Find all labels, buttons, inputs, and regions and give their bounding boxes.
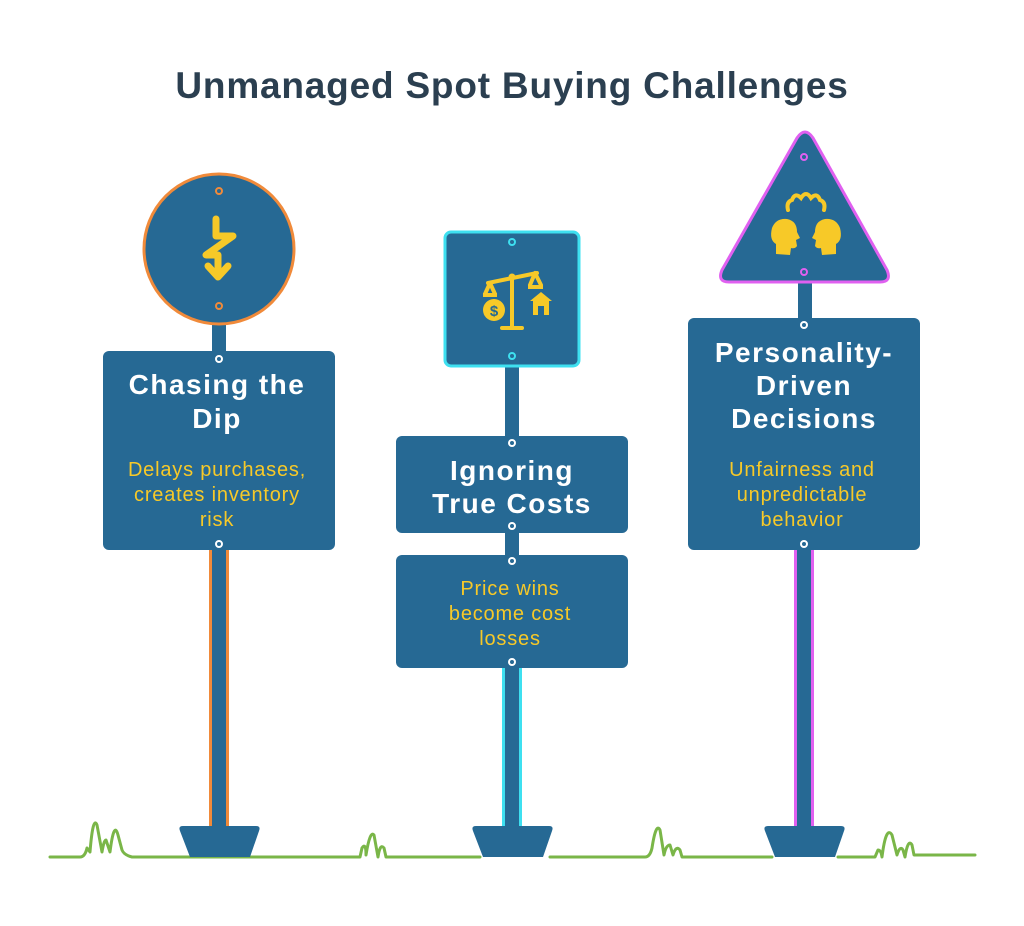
base bbox=[472, 826, 553, 857]
circle sign with icon bbox=[144, 174, 294, 324]
board: Chasing the Dip: Dip bbox=[192, 403, 242, 434]
board: Ignoring True Costs: Ignoring bbox=[450, 455, 574, 486]
board: Personality-Driven Decisions bbox=[688, 318, 920, 550]
board: Personality-Driven Decisions: Personality- bbox=[715, 337, 893, 368]
board: Ignoring True Costs: True Costs bbox=[432, 488, 592, 519]
base bbox=[179, 826, 260, 857]
board: Chasing the Dip: Delays purchases, bbox=[128, 459, 306, 481]
sign 2: Ignoring True Costs bbox=[396, 232, 628, 857]
pole lower bbox=[209, 545, 229, 827]
board: Personality-Driven Decisions: behavior bbox=[760, 509, 844, 531]
pole upper bbox=[212, 318, 226, 354]
pole upper bbox=[505, 362, 519, 440]
board: Chasing the Dip: risk bbox=[200, 509, 234, 531]
board: Chasing the Dip bbox=[103, 351, 335, 550]
sign 3: Personality-Driven Decisions bbox=[688, 132, 920, 857]
board: price wins: become cost bbox=[449, 603, 571, 625]
board: Chasing the Dip: Chasing the bbox=[129, 369, 305, 400]
board: Chasing the Dip: creates inventory bbox=[134, 484, 300, 506]
board: price wins: losses bbox=[479, 628, 541, 650]
title: Unmanaged Spot Buying Challenges bbox=[175, 65, 849, 106]
icon: two heads conflict bbox=[788, 194, 824, 210]
triangle sign with icon bbox=[721, 132, 888, 282]
board: price wins bbox=[396, 555, 628, 668]
board: Personality-Driven Decisions: unpredictable bbox=[737, 484, 867, 506]
board: Personality-Driven Decisions: Unfairness and bbox=[729, 459, 875, 481]
board: Personality-Driven Decisions: Driven bbox=[756, 370, 852, 401]
board: Ignoring True Costs bbox=[396, 436, 628, 533]
square sign with icon bbox=[445, 232, 579, 366]
base bbox=[764, 826, 845, 857]
sign 1: Chasing the Dip bbox=[103, 174, 335, 857]
grass ground line bbox=[50, 823, 975, 857]
board: price wins: Price wins bbox=[460, 578, 560, 600]
pole lower bbox=[502, 665, 522, 827]
board: Personality-Driven Decisions: Decisions bbox=[731, 403, 877, 434]
icon: scale with dollar and house bbox=[483, 273, 552, 328]
pole lower bbox=[794, 545, 814, 827]
square sign with icon: $ bbox=[490, 303, 499, 320]
icon: zigzag down arrow bbox=[206, 219, 233, 277]
pole upper bbox=[798, 278, 812, 322]
